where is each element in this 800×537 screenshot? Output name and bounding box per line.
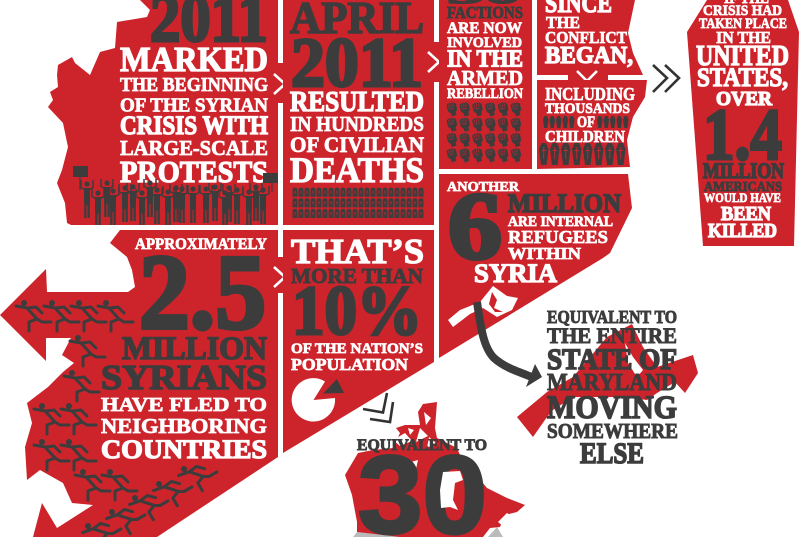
text block: are internal refugees within Syria: REFUGEES [508,227,608,247]
arrow: double chevron to coffin [653,65,679,92]
map: Canada [345,402,525,537]
headline number: 2.5 million Syrians: MILLION [122,331,267,367]
text block: have fled to neighboring countries: NEIGHBORING [101,414,267,438]
text: another: ANOTHER [447,180,520,195]
text block: equivalent to the entire state of Maryland moving somewhere else: MARYLAND [547,370,677,396]
text: approximately: APPROXIMATELY [135,236,267,253]
panel: Canada map comparison [345,402,525,537]
icon: running figures [16,300,221,537]
text block: marked the beginning of the Syrian crisis with large-scale protests: OF THE SYRIAN [120,94,269,116]
text block: since the conflict began: CONFLICT [545,28,628,47]
text block: including thousands of children: OF [577,114,595,131]
text block: factions are now involved in the armed rebellion: FACTIONS [447,3,523,22]
text block: marked the beginning of the Syrian crisis with large-scale protests: THE BEGINNING [120,74,268,96]
panel: more than 10 percent of population [283,230,434,453]
map: red Maryland silhouette [517,324,698,437]
text block: would have been killed [704,190,781,242]
icon: pie chart with slice pulled out [292,378,344,422]
text block: factions are now involved in the armed rebellion: ARE NOW [447,20,522,37]
text block: equivalent to the entire state of Maryland moving somewhere else: THE ENTIRE [547,323,677,348]
text block: have fled to neighboring countries: HAVE FLED TO [101,394,267,416]
text block: would have been killed: KILLED [708,220,777,242]
arrow: chevron to factions panel [428,52,439,72]
text block: marked the beginning of the Syrian crisis with large-scale protests: CRISIS WITH [120,111,268,140]
text block: since the conflict began [545,0,633,69]
headline number: 6 million [448,173,621,279]
panel: 2.5 million refugees map with arrows [0,230,283,537]
text block: marked the beginning of the Syrian crisis with large-scale protests: LARGE-SCALE [120,136,268,160]
text block: factions are now involved in the armed rebellion [447,0,523,102]
text block: have fled to neighboring countries: COUNTRIES [101,435,267,464]
text block: of the nation's population: OF THE NATION’S [291,341,423,357]
panel: factions [439,0,532,169]
panel: 6 million internal refugees [439,173,632,358]
text: equivalent to: EQUIVALENT TO [357,437,487,454]
text block: of the nation's population: POPULATION [291,355,409,374]
map: white Maryland silhouette [448,286,518,327]
text block: have fled to neighboring countries [101,394,267,464]
arrow: chevron to April panel [274,74,285,94]
headline number: 6 million: MILLION [508,189,621,218]
text block: are internal refugees within Syria: ARE INTERNAL [508,214,613,230]
text block: including thousands of children: CHILDREN [545,127,626,146]
text block: equivalent to the entire state of Maryland moving somewhere else: SOMEWHERE [547,419,678,443]
text block: since the conflict began: THE [546,13,580,32]
headline number: 2.5 million Syrians: SYRIANS [101,358,267,397]
map detail: Hudson Bay [440,471,463,510]
headline number: 6 million: 6 [448,173,502,279]
arrow: chevron down to children panel [577,71,597,81]
text block: marked the beginning of the Syrian crisis with large-scale protests: MARKED [120,40,268,79]
text block: crisis had taken place in the United States: OVER [716,88,773,110]
text block: factions are now involved in the armed rebellion: REBELLION [447,86,523,102]
text block: resulted in hundreds of civilian deaths: IN HUNDREDS [290,112,424,136]
text block: equivalent to the entire state of Maryland moving somewhere else: ELSE [580,437,644,470]
text block: including thousands of children: INCLUDING [545,84,635,104]
text block: including thousands of children: THOUSANDS [545,101,630,117]
icon: large coffins [539,143,626,165]
text block: resulted in hundreds of civilian deaths: DEATHS [290,150,424,190]
panel: coffin United States comparison [687,0,799,246]
text block: would have been killed: WOULD HAVE [704,190,781,205]
text block: factions are now involved in the armed rebellion: ARMED [447,66,523,90]
text block: factions are now involved in the armed rebellion: IN THE [447,46,523,72]
panel: April 2011 [283,0,439,225]
text block: resulted in hundreds of civilian deaths: RESULTED [290,87,424,118]
headline number: more than 10%: MORE THAN [291,264,423,288]
arrow: double chevron down to Canada [363,393,393,422]
arrow: chevron to population panel [274,267,285,287]
headline number: more than 10%: 10% [292,273,422,350]
text block: crisis had taken place in the United States [696,0,789,110]
arrow: curved arrow to Maryland [477,302,542,387]
headline number: 2.5 million Syrians: 2.5 [139,234,266,352]
text: that's: THAT’S [291,232,424,271]
headline number: 1.4 million Americans: 1.4 [703,94,782,175]
headline number: 2.5 million Syrians [101,234,267,397]
icon: protest crowd with signs [73,166,278,227]
icon: rows of tombstones [292,187,424,219]
text block: are internal refugees within Syria [474,214,613,288]
text block: crisis had taken place in the United States: CRISIS HAD [703,3,782,19]
text block: marked the beginning of the Syrian crisis with large-scale protests [120,40,269,189]
icon: small coffins [543,116,629,128]
text block: equivalent to the entire state of Maryland moving somewhere else: MOVING [547,390,677,426]
headline number: 1.4 million Americans: AMERICANS [704,180,782,195]
text block: are internal refugees within Syria: WITHIN [508,244,582,263]
text block: would have been killed: BEEN [721,203,772,225]
panel: since the conflict began [537,0,643,80]
text block: since the conflict began: BEGAN, [545,43,633,69]
text block: equivalent to the entire state of Maryland moving somewhere else: STATE OF [547,343,677,376]
panel: 2011 marked the beginning [48,0,283,227]
text block: marked the beginning of the Syrian crisis with large-scale protests: PROTESTS [120,154,268,189]
text block: crisis had taken place in the United States: STATES, [697,63,788,92]
icon: grid of raised fists [446,102,523,164]
text block: resulted in hundreds of civilian deaths [290,87,424,190]
headline: April 2011: 2011 [291,25,423,102]
panel: including thousands of children [537,80,647,169]
text block: equivalent to the entire state of Maryland moving somewhere else [547,307,678,470]
text block: are internal refugees within Syria: SYRIA [474,259,557,288]
text block: crisis had taken place in the United States: IN THE [716,28,771,47]
text block: of the nation's population [291,341,423,374]
text block: factions are now involved in the armed rebellion: INVOLVED [447,35,522,51]
text block: equivalent to the entire state of Maryland moving somewhere else: EQUIVALENT TO [547,307,677,327]
text block: including thousands of children [545,84,635,146]
text block: resulted in hundreds of civilian deaths: OF CIVILIAN [290,132,424,157]
